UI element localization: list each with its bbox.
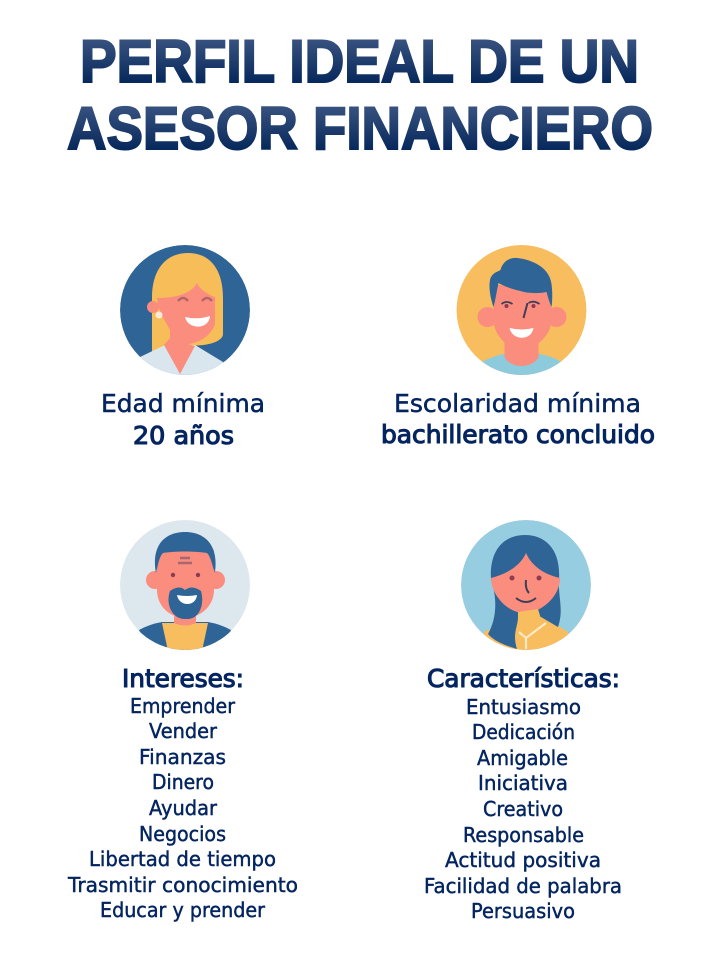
text: characteristics list: Iniciativa <box>478 771 568 795</box>
text: minimum age: 20 años <box>133 421 234 450</box>
text: interests list: Dinero <box>152 770 214 794</box>
text: interests list: Vender <box>149 719 218 743</box>
text: characteristics list: Actitud positiva <box>445 848 601 872</box>
text: interests list: Intereses: <box>122 664 244 693</box>
text: characteristics list: Creativo <box>483 797 563 821</box>
text: minimum schooling: Escolaridad mínima <box>394 389 641 418</box>
icon: man with blue hair avatar <box>456 245 586 380</box>
text: interests list: Finanzas <box>139 745 226 769</box>
icon: bearded man avatar <box>120 520 250 655</box>
text: minimum schooling <box>381 389 655 449</box>
icon: woman with long blue hair avatar <box>461 520 591 655</box>
title: PERFIL IDEAL DE UN <box>80 28 639 95</box>
text: interests list: Educar y prender <box>100 898 266 922</box>
text: interests list: Trasmitir conocimiento <box>67 873 298 897</box>
text: characteristics list: Dedicación <box>472 720 575 744</box>
text: characteristics list: Entusiasmo <box>466 695 581 719</box>
text: interests list <box>67 664 298 922</box>
text: characteristics list: Amigable <box>477 746 568 770</box>
text: interests list: Libertad de tiempo <box>89 847 276 871</box>
text: characteristics list: Responsable <box>463 823 584 847</box>
text: minimum schooling: bachillerato concluido <box>381 420 655 449</box>
text: minimum age <box>101 389 265 450</box>
text: characteristics list: Facilidad de palabra <box>424 874 622 898</box>
icon: woman with blonde hair avatar <box>120 245 250 380</box>
text: interests list: Emprender <box>130 694 236 718</box>
text: characteristics list <box>424 664 622 923</box>
title <box>67 28 653 162</box>
text: interests list: Ayudar <box>149 796 218 820</box>
title: ASESOR FINANCIERO <box>67 95 653 162</box>
text: interests list: Negocios <box>139 822 226 846</box>
text: characteristics list: Características: <box>427 664 620 693</box>
text: characteristics list: Persuasivo <box>471 899 575 923</box>
text: minimum age: Edad mínima <box>101 389 265 418</box>
